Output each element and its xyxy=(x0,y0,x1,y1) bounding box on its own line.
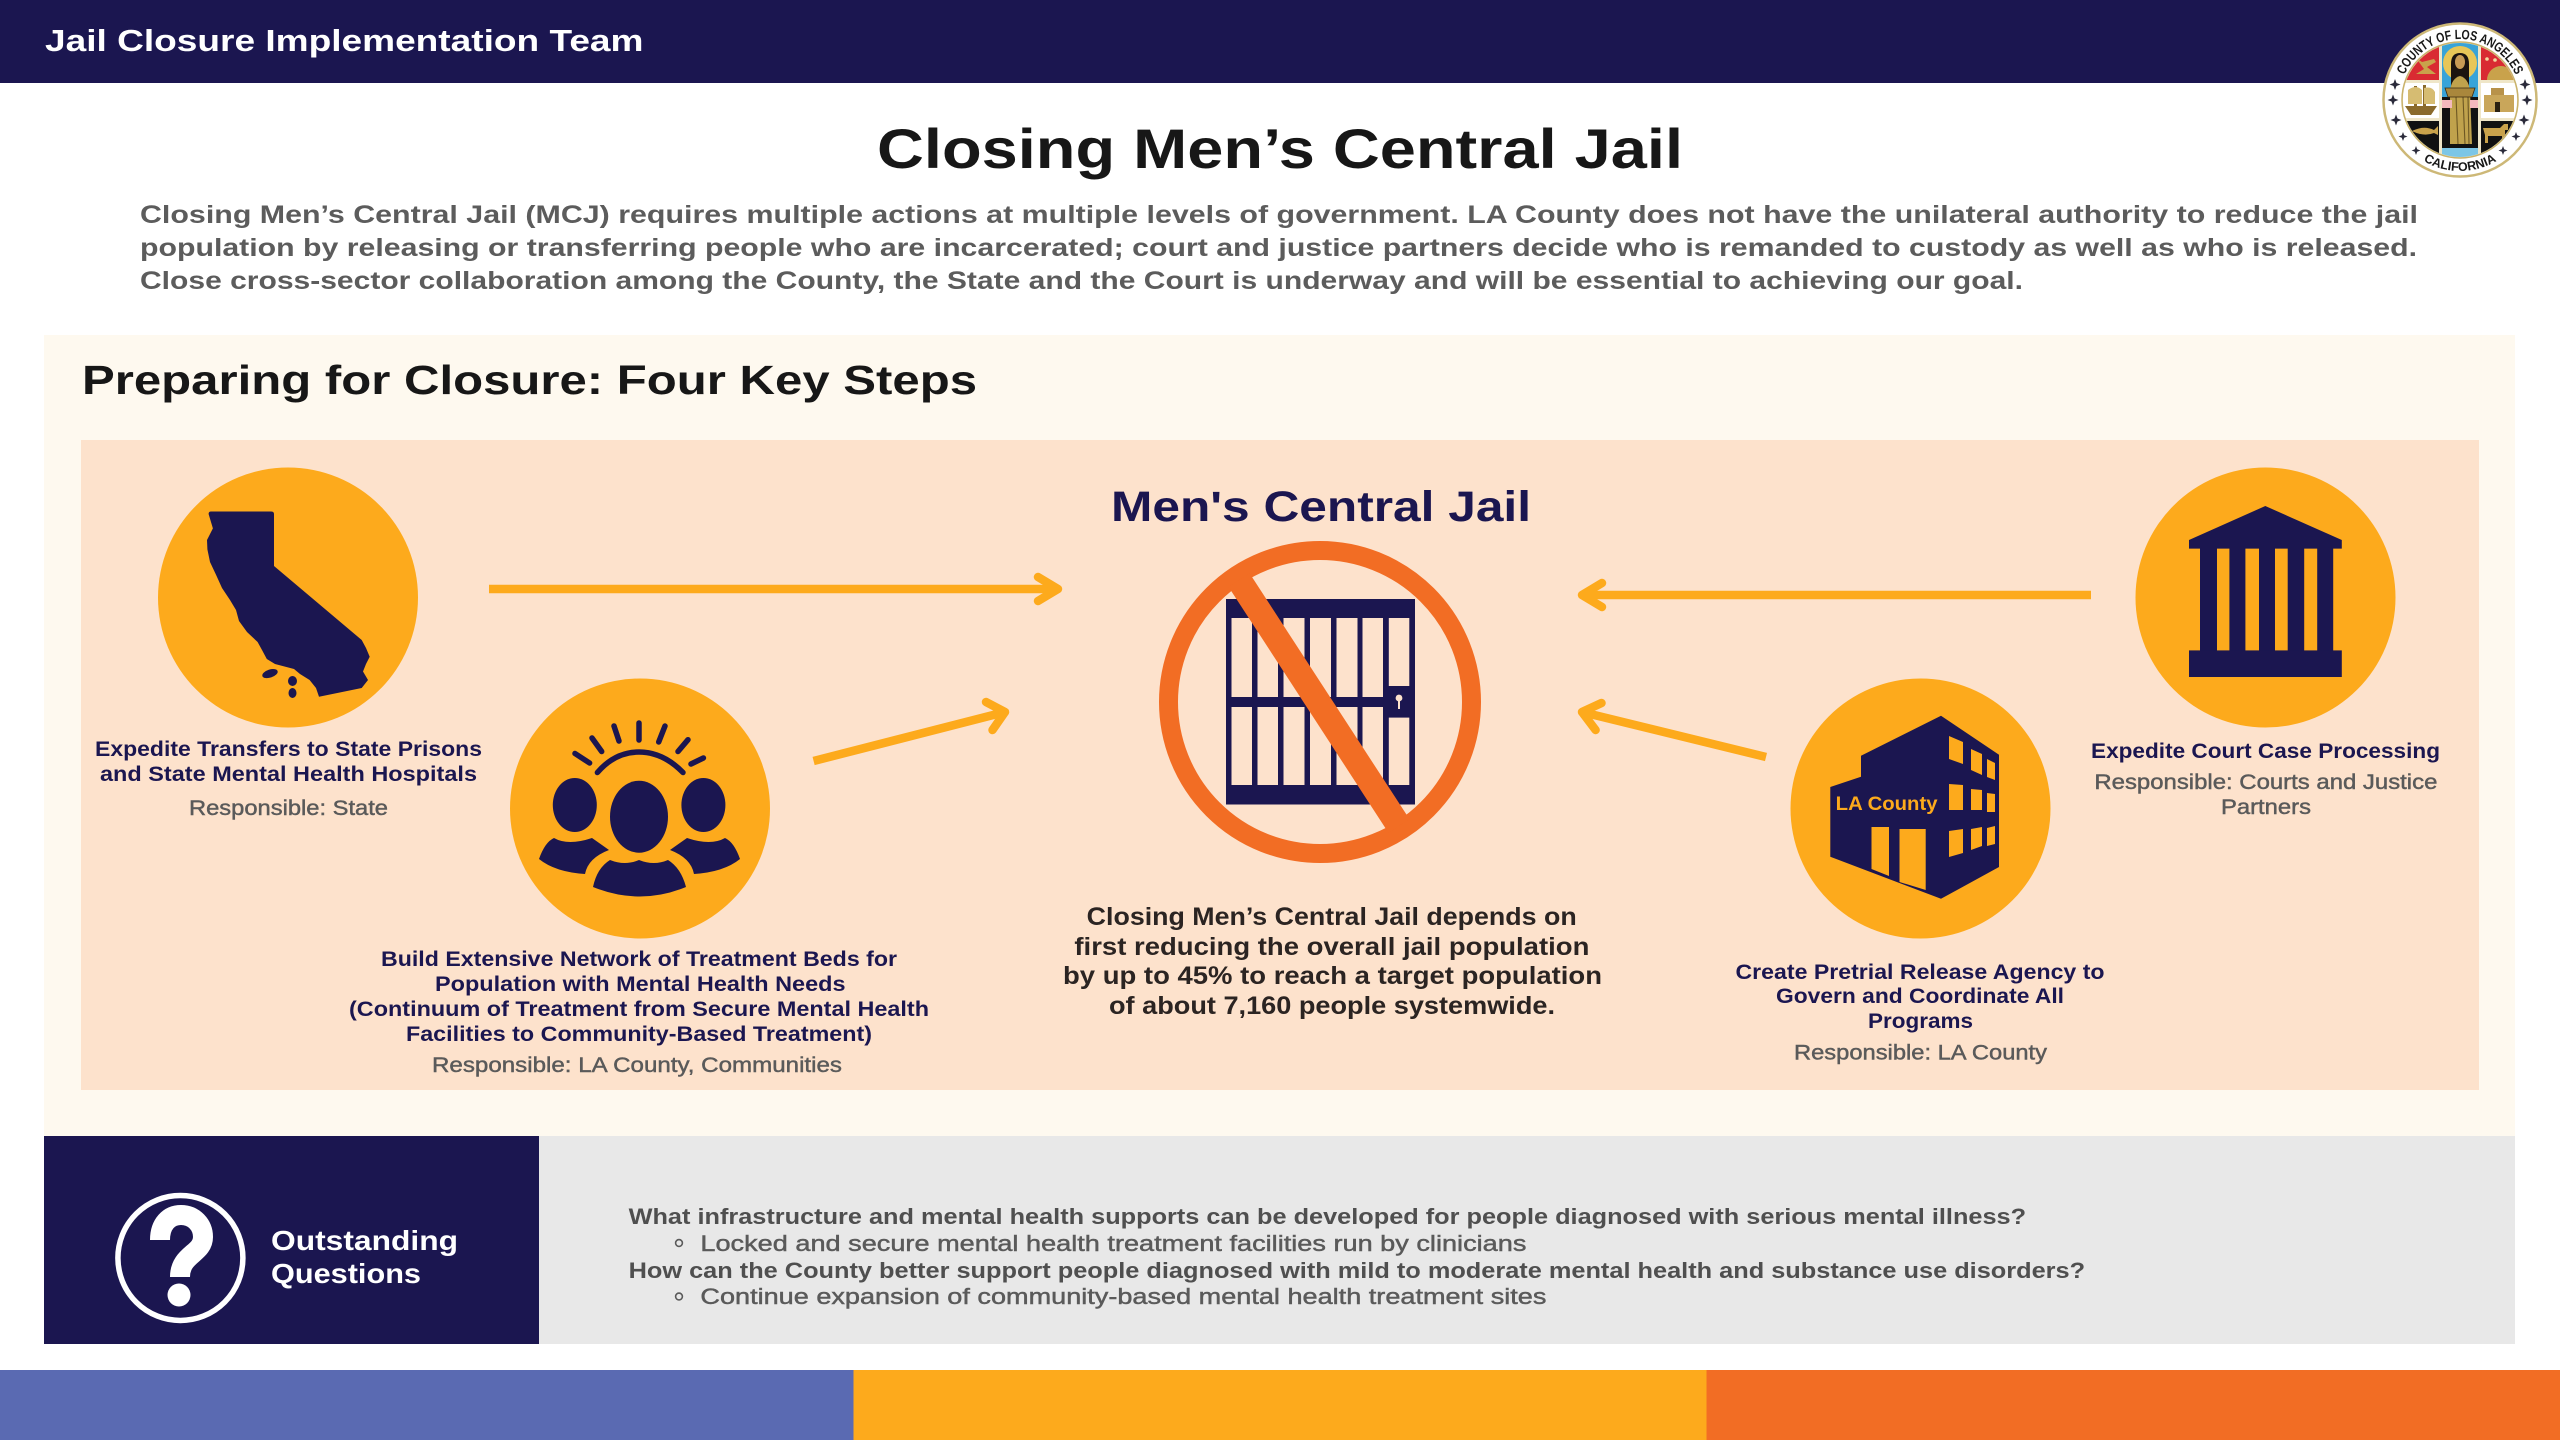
intro paragraph: Close cross-sector collaboration among the County, the State and the Court is underway and will be essential to achieving our goal. xyxy=(140,267,2023,295)
page title: Closing Men’s Central Jail xyxy=(877,117,1683,180)
icon: jail bars with prohibition sign xyxy=(1168,550,1472,854)
questions title xyxy=(271,1225,458,1289)
step: treatment beds xyxy=(349,678,929,1077)
icon: question mark xyxy=(118,1196,243,1320)
center statement: by up to 45% to reach a target population xyxy=(1063,962,1602,990)
intro paragraph: population by releasing or transferring people who are incarcerated; court and justice partners decide who is remanded to custody as well as who is released. xyxy=(140,234,2417,262)
label: Create Pretrial Release Agency to xyxy=(1736,961,2104,984)
questions title block xyxy=(44,1136,539,1344)
center statement: of about 7,160 people systemwide. xyxy=(1109,992,1555,1020)
icon: County of Los Angeles seal: CALIFORNIA xyxy=(2425,154,2496,171)
panel heading: Preparing for Closure: Four Key Steps xyxy=(82,357,977,403)
label: and State Mental Health Hospitals xyxy=(100,763,477,786)
label: Responsible: State xyxy=(189,797,388,820)
label: Responsible: LA County xyxy=(1794,1042,2048,1064)
label xyxy=(95,738,482,820)
questions title: Outstanding xyxy=(271,1225,458,1256)
arrow: state to jail xyxy=(489,577,1058,601)
step: state transfers xyxy=(95,468,482,820)
intro paragraph xyxy=(140,201,2418,295)
icon: County of Los Angeles seal xyxy=(2382,22,2538,178)
questions list: Locked and secure mental health treatment facilities run by clinicians xyxy=(700,1231,1526,1256)
building label: LA County xyxy=(1836,793,1938,815)
label xyxy=(2091,740,2440,819)
arrow: pretrial agency to jail xyxy=(1582,703,1766,757)
center: Men's Central Jail xyxy=(1063,483,1602,1020)
center statement: first reducing the overall jail population xyxy=(1074,933,1589,961)
icon: people xyxy=(510,678,770,938)
label: Govern and Coordinate All xyxy=(1776,985,2064,1008)
questions list: How can the County better support people diagnosed with mild to moderate mental health and substance use disorders? xyxy=(629,1258,2085,1283)
icon: County of Los Angeles seal: COUNTY OF LOS ANGELES xyxy=(2397,30,2523,74)
icon: courthouse xyxy=(2136,468,2396,728)
label xyxy=(1736,961,2104,1064)
center heading: Men's Central Jail xyxy=(1111,483,1531,531)
label xyxy=(349,948,929,1077)
step: pretrial release agency xyxy=(1736,678,2104,1064)
footer colour bands xyxy=(0,1370,2560,1440)
center statement: Closing Men’s Central Jail depends on xyxy=(1087,903,1577,931)
header bar xyxy=(0,0,2560,83)
inner diagram background xyxy=(81,440,2479,1090)
label: Population with Mental Health Needs xyxy=(435,973,846,996)
icon: California xyxy=(158,468,418,728)
questions list: Continue expansion of community-based mental health treatment sites xyxy=(700,1284,1546,1309)
label: Responsible: Courts and Justice xyxy=(2094,771,2437,794)
panel: four key steps xyxy=(44,335,2515,1136)
arrow: courts to jail xyxy=(1582,583,2091,607)
label: Responsible: LA County, Communities xyxy=(432,1054,842,1077)
icon: county building xyxy=(1790,678,2050,938)
step: court case processing xyxy=(2091,468,2440,819)
arrow: treatment beds to jail xyxy=(814,702,1005,761)
header title: Jail Closure Implementation Team xyxy=(45,23,644,58)
center statement xyxy=(1063,903,1602,1020)
label: Programs xyxy=(1868,1010,1973,1033)
label: Expedite Court Case Processing xyxy=(2091,740,2440,763)
label: Partners xyxy=(2221,796,2311,819)
questions title: Questions xyxy=(271,1258,421,1289)
label: (Continuum of Treatment from Secure Mental Health xyxy=(349,998,929,1021)
intro paragraph: Closing Men’s Central Jail (MCJ) requires multiple actions at multiple levels of government. LA County does not have the unilateral authority to reduce the jail xyxy=(140,201,2418,229)
label: Expedite Transfers to State Prisons xyxy=(95,738,482,761)
questions list: What infrastructure and mental health supports can be developed for people diagnosed with serious mental illness? xyxy=(629,1204,2026,1229)
questions list xyxy=(539,1136,2515,1344)
panel: outstanding questions xyxy=(44,1136,2515,1344)
label: Build Extensive Network of Treatment Beds for xyxy=(381,948,897,971)
label: Facilities to Community-Based Treatment) xyxy=(406,1023,872,1046)
